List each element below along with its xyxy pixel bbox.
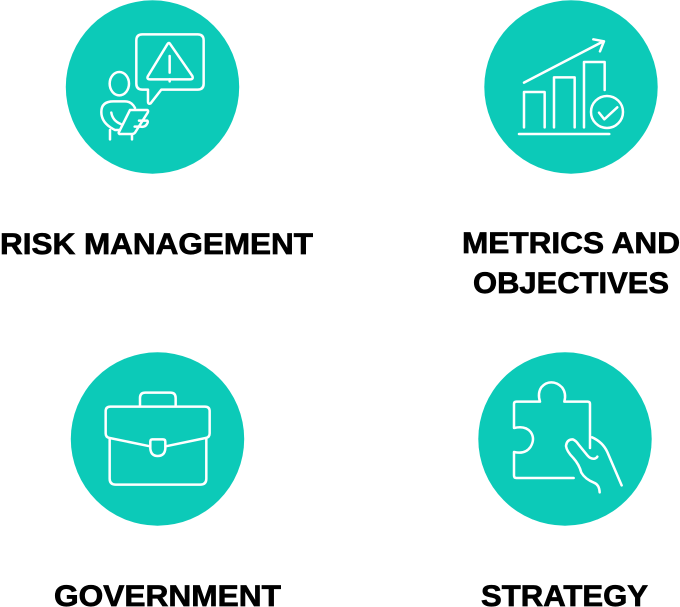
icon: puzzle piece held by hand xyxy=(514,382,622,492)
icon: person with warning speech bubble xyxy=(101,34,204,139)
icon circle: strategy xyxy=(478,352,652,526)
icon: briefcase xyxy=(106,393,210,485)
icon circle: government xyxy=(71,352,244,526)
icon: rising bar chart with check mark xyxy=(519,39,623,134)
heading: metrics and objectives xyxy=(462,227,680,300)
icon circle: risk management xyxy=(66,0,239,174)
heading: metrics and objectives: METRICS AND xyxy=(462,227,680,260)
icon circle: metrics xyxy=(484,0,658,174)
panel: metrics and objectives xyxy=(484,0,658,174)
panel: government xyxy=(71,352,244,526)
panel: strategy xyxy=(478,352,652,526)
heading: metrics and objectives: OBJECTIVES xyxy=(473,267,669,300)
panel: risk management xyxy=(66,0,239,174)
heading: risk management: RISK MANAGEMENT xyxy=(0,228,313,261)
